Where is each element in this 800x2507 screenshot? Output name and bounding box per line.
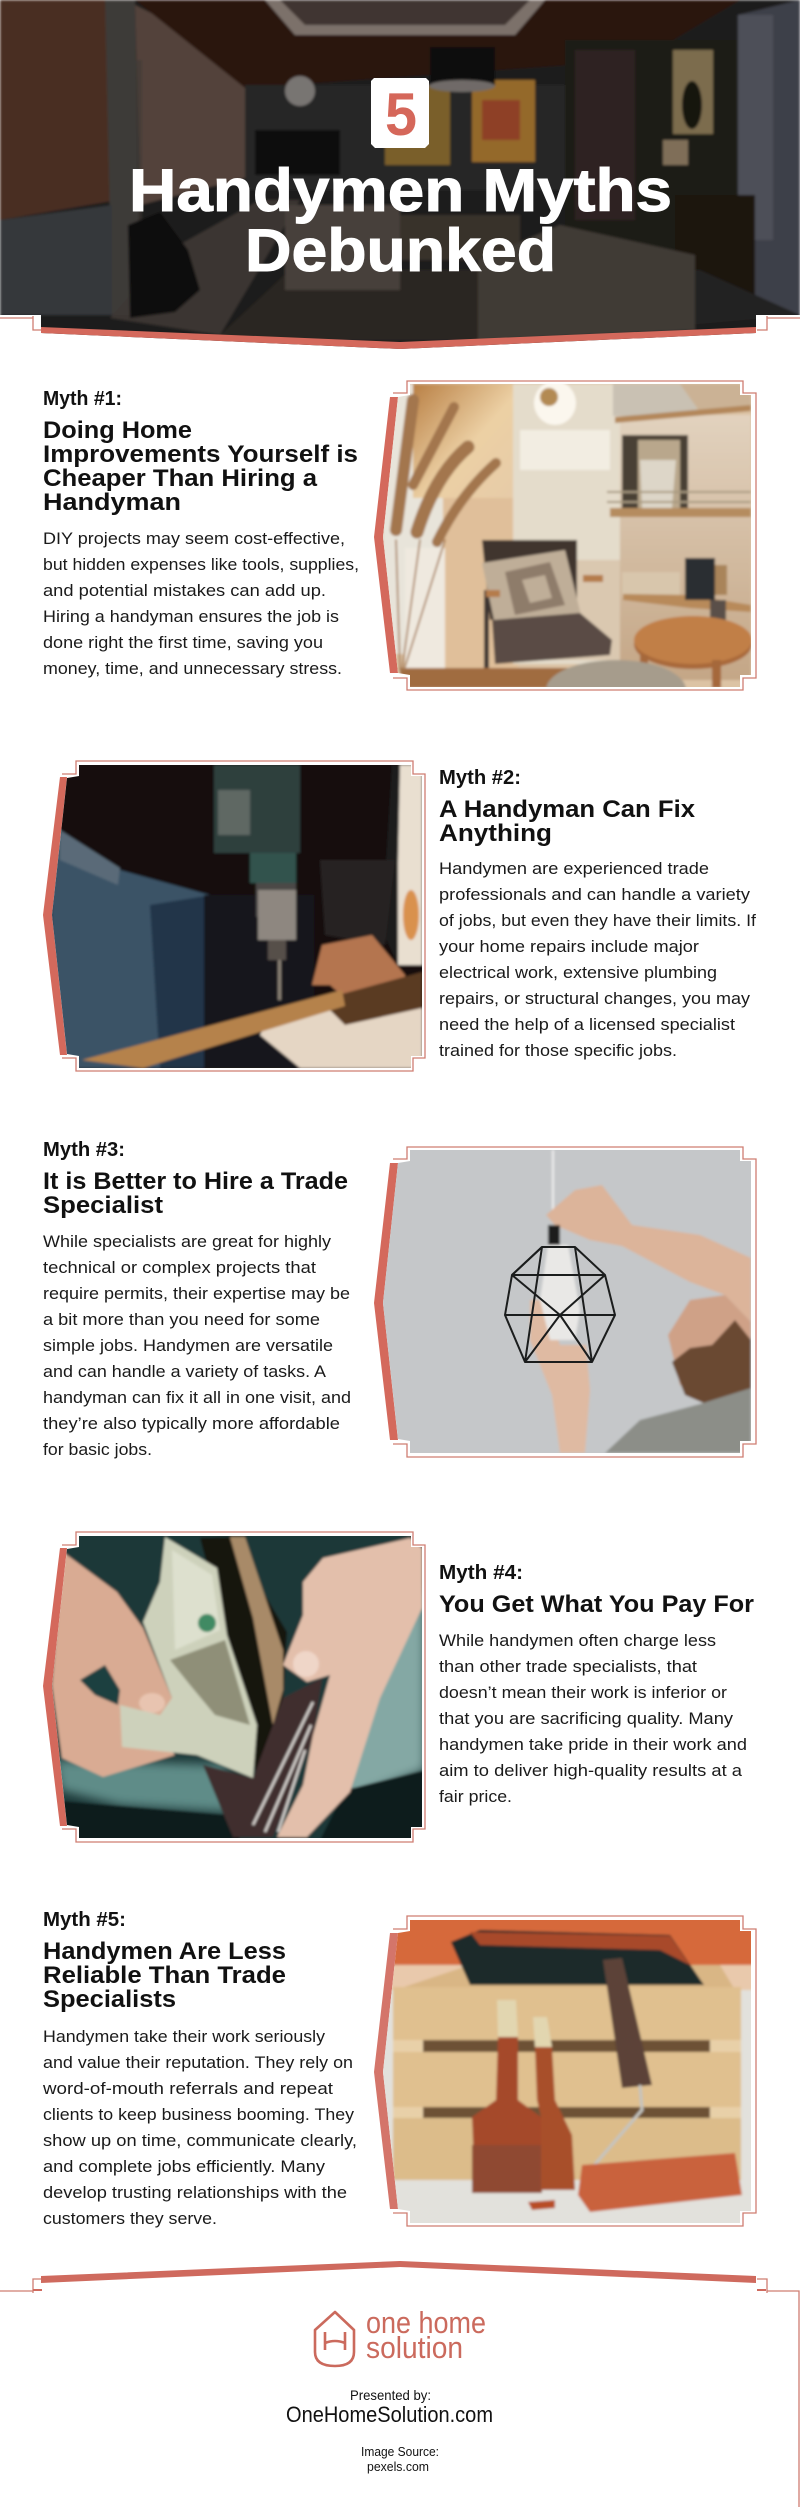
icon: house with H <box>315 2312 354 2366</box>
myth 2 body: electrical work, extensive plumbing <box>439 964 717 982</box>
myth 2 body: of jobs, but even they have their limits. If <box>439 912 756 930</box>
photo: cozy corner <box>383 384 751 687</box>
myth 5 heading: Reliable Than Trade <box>43 1962 286 1989</box>
myth 2 heading <box>439 796 695 847</box>
myth 2 heading: Anything <box>439 820 552 847</box>
myth 2 body: need the help of a licensed specialist <box>439 1016 735 1034</box>
myth 4 body: handymen take pride in their work and <box>439 1736 747 1754</box>
myth 1 heading: Handyman <box>43 489 181 516</box>
myth 3 body: a bit more than you need for some <box>43 1311 320 1329</box>
myth 5 body: clients to keep business booming. They <box>43 2106 355 2124</box>
myth 2 body: professionals and can handle a variety <box>439 886 751 904</box>
panel: myth 4 image <box>43 1530 425 1842</box>
myth 5 body: word-of-mouth referrals and repeat <box>42 2080 333 2098</box>
frame outline <box>62 1532 425 1842</box>
myth 5 body <box>42 2028 357 2228</box>
myth 4 body: fair price. <box>439 1788 512 1806</box>
photo: man fitting a caged lamp <box>380 1145 755 1457</box>
panel: myth 2 text <box>439 766 756 1060</box>
myth 1 body: and potential mistakes can add up. <box>43 582 326 600</box>
myth 4 body: doesn’t mean their work is inferior or <box>439 1684 728 1702</box>
panel: myth 3 text <box>43 1138 351 1459</box>
photo: drill on wood <box>50 760 425 1070</box>
myth 2 body: your home repairs include major <box>439 938 700 956</box>
myth 1 heading: Cheaper Than Hiring a <box>43 465 317 492</box>
logo wordmark <box>366 2305 486 2365</box>
myth 1 heading: Doing Home <box>43 417 192 444</box>
myth 5 heading: Specialists <box>43 1986 176 2013</box>
myth 2 label: Myth #2: <box>439 766 521 789</box>
badge with number 5: 5 <box>385 81 417 148</box>
myth 4 label: Myth #4: <box>439 1561 523 1584</box>
footer red chevron strip <box>41 2261 756 2283</box>
myth 3 heading: Specialist <box>43 1192 163 1219</box>
hero photo: dark living room <box>0 0 800 350</box>
myth 3 body: require permits, their expertise may be <box>43 1285 350 1303</box>
panel: myth 4 text <box>439 1561 754 1806</box>
floor and sofas <box>110 200 300 335</box>
hero banner <box>0 0 800 350</box>
myth 1 body: but hidden expenses like tools, supplies, <box>43 556 359 574</box>
frame outline <box>393 1147 756 1457</box>
title <box>129 157 672 284</box>
myth 3 label: Myth #3: <box>43 1138 125 1161</box>
myth 4 body: than other trade specialists, that <box>439 1658 697 1676</box>
logo wordmark: solution <box>366 2330 463 2365</box>
art <box>385 85 450 165</box>
myth 5 body: and complete jobs efficiently. Many <box>43 2158 326 2176</box>
wallet leather <box>203 1678 322 1837</box>
money <box>120 1537 257 1778</box>
myth 2 body <box>439 860 756 1060</box>
myth 5 heading <box>43 1938 286 2013</box>
badge with number 5 <box>371 78 429 148</box>
myth 3 body: they’re also typically more affordable <box>43 1415 340 1433</box>
accent stripe <box>374 397 398 673</box>
myth 3 body: technical or complex projects that <box>43 1259 316 1277</box>
myth 5 body: show up on time, communicate clearly, <box>43 2132 357 2150</box>
accent stripe <box>374 1163 398 1440</box>
footer <box>0 2261 799 2507</box>
myth 2 body: repairs, or structural changes, you may <box>439 990 751 1008</box>
myth 5 label: Myth #5: <box>43 1908 126 1931</box>
image source: pexels.com <box>367 2459 429 2474</box>
panel: myth 5 text <box>42 1908 357 2228</box>
right hand <box>277 1538 422 1837</box>
myth 1 body: done right the first time, saving you <box>43 634 323 652</box>
left hand <box>52 1552 175 1777</box>
hero red chevron strip <box>41 327 756 349</box>
frame outline <box>393 1916 756 2226</box>
myth 3 body: handyman can fix it all in one visit, and <box>43 1389 351 1407</box>
myth 1 body: Hiring a handyman ensures the job is <box>43 608 339 626</box>
myth 1 heading: Improvements Yourself is <box>43 441 358 468</box>
myth 4 body: While handymen often charge less <box>439 1632 716 1650</box>
myth 4 body: aim to deliver high-quality results at a <box>439 1762 743 1780</box>
accent stripe <box>43 777 67 1055</box>
photo: paint brushes and crate <box>380 1915 755 2227</box>
myth 2 heading: A Handyman Can Fix <box>439 796 695 823</box>
panel: myth 2 image <box>43 760 425 1071</box>
myth 2 body: Handymen are experienced trade <box>439 860 709 878</box>
wallet interior <box>200 1537 287 1778</box>
myth 3 heading <box>43 1168 348 1219</box>
presented by: Presented by: <box>350 2387 431 2403</box>
myth 5 body: customers they serve. <box>43 2210 217 2228</box>
website: OneHomeSolution.com <box>286 2402 493 2427</box>
panel: myth 1 text <box>43 387 359 678</box>
myth 3 heading: It is Better to Hire a Trade <box>43 1168 348 1195</box>
image source: Image Source: <box>361 2444 439 2459</box>
logo wordmark: one home <box>366 2305 486 2340</box>
myth 5 heading: Handymen Are Less <box>43 1938 286 1965</box>
myth 3 body <box>43 1233 351 1459</box>
myth 3 body: for basic jobs. <box>43 1441 152 1459</box>
myth 3 body: and can handle a variety of tasks. A <box>43 1363 326 1381</box>
myth 2 body: trained for those specific jobs. <box>439 1042 677 1060</box>
accent stripe <box>374 1933 398 2209</box>
panel: myth 3 image <box>374 1145 756 1457</box>
frame outline <box>393 381 756 690</box>
myth 1 heading <box>43 417 358 516</box>
panel: myth 1 image <box>374 380 756 720</box>
myth 4 body <box>439 1632 747 1806</box>
myth 4 heading: You Get What You Pay For <box>439 1591 754 1618</box>
myth 4 body: that you are sacrificing quality. Many <box>439 1710 734 1728</box>
lamp cage <box>505 1247 615 1362</box>
accent stripe <box>43 1548 67 1826</box>
frame outline <box>62 761 425 1071</box>
myth 5 body: Handymen take their work seriously <box>43 2028 326 2046</box>
title: Handymen Myths <box>129 157 672 224</box>
myth 1 body <box>43 530 359 678</box>
title: Debunked <box>245 217 556 284</box>
myth 3 body: While specialists are great for highly <box>43 1233 332 1251</box>
myth 1 label: Myth #1: <box>43 387 122 410</box>
myth 5 body: develop trusting relationships with the <box>43 2184 347 2202</box>
image source <box>361 2444 439 2474</box>
myth 3 body: simple jobs. Handymen are versatile <box>43 1337 333 1355</box>
myth 1 body: money, time, and unnecessary stress. <box>43 660 342 678</box>
logo <box>315 2305 486 2366</box>
myth 5 body: and value their reputation. They rely on <box>43 2054 353 2072</box>
photo: hands opening a wallet <box>50 1530 425 1842</box>
footer outline <box>0 2279 799 2507</box>
panel: myth 5 image <box>374 1915 756 2227</box>
myth 1 body: DIY projects may seem cost-effective, <box>43 530 345 548</box>
